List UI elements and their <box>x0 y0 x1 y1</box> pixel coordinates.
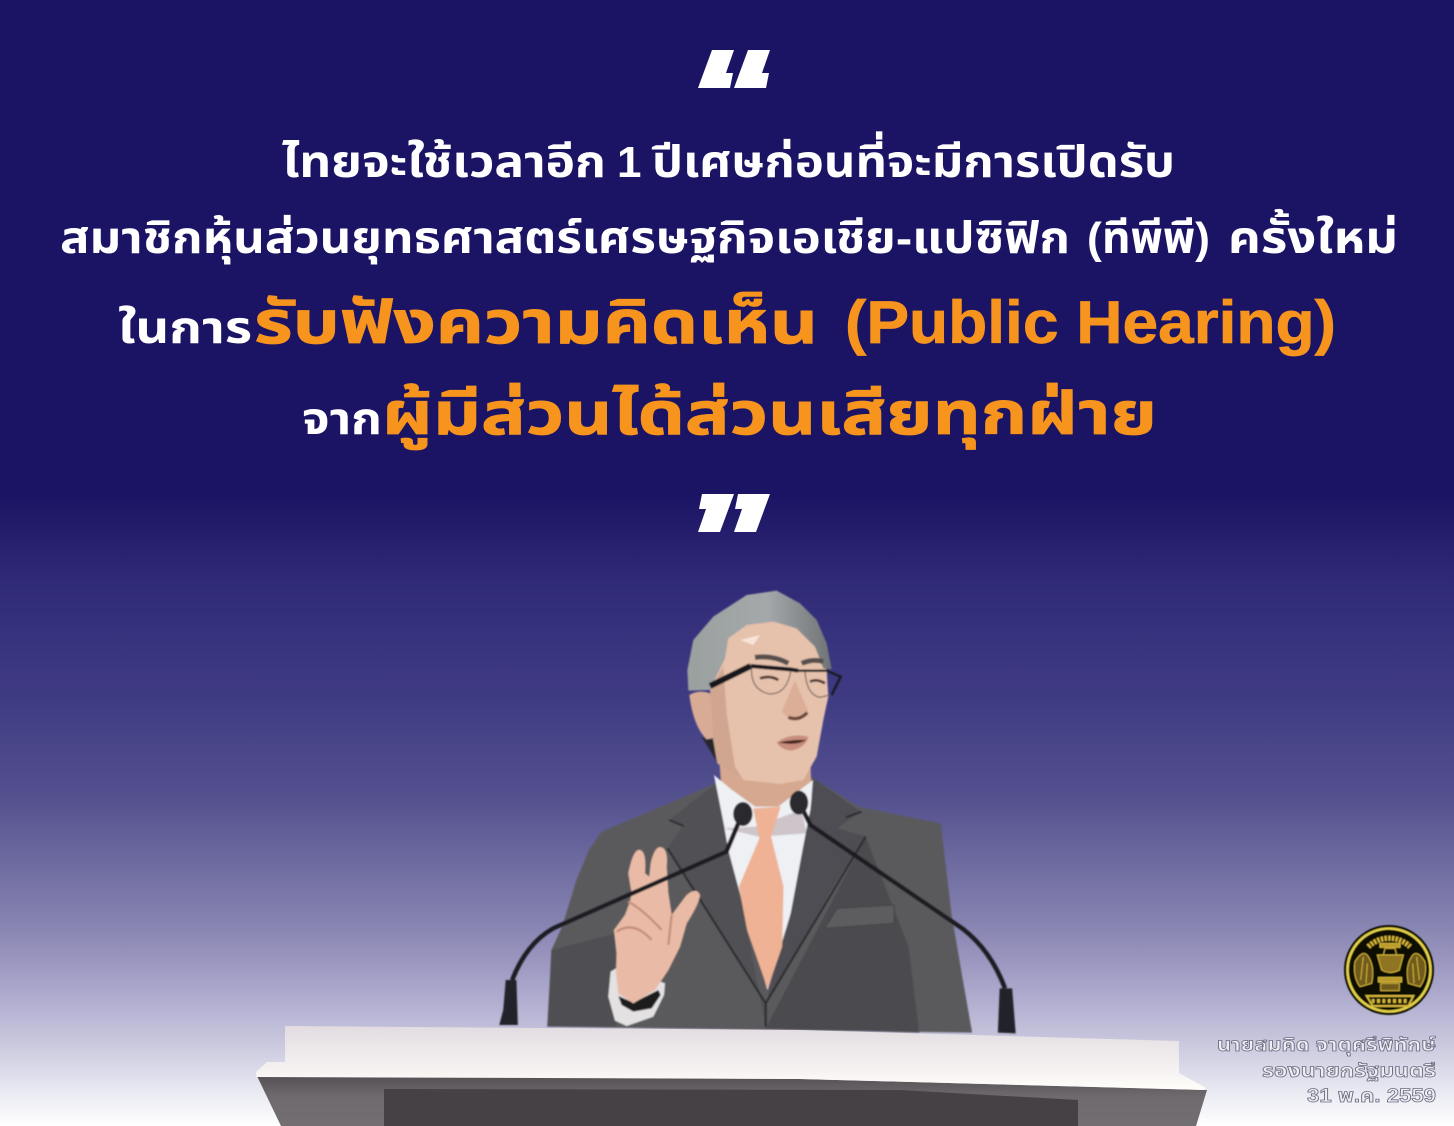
logo: government seal <box>1344 925 1434 1015</box>
left microphone <box>499 802 752 1025</box>
quote line 4: ผู้มีส่วนได้ส่วนเสียทุกฝ่าย <box>382 380 1157 450</box>
eyes <box>760 677 825 683</box>
head <box>687 591 841 784</box>
icon: closing quotation mark <box>698 494 770 532</box>
quote line 2: ครั้งใหม่ <box>1228 209 1398 263</box>
icon: opening quotation mark <box>698 50 770 88</box>
mouth <box>777 736 808 751</box>
quote line 1: 1 <box>617 138 641 187</box>
quote line 3: (Public Hearing) <box>845 289 1336 356</box>
quote line 4 <box>302 380 1157 450</box>
necktie <box>739 807 784 988</box>
nose <box>782 680 808 719</box>
torso <box>547 760 972 1033</box>
lapels <box>667 783 766 1027</box>
raised hand <box>608 847 700 1026</box>
shirt <box>714 775 813 990</box>
quote line 2 <box>60 209 1398 265</box>
quote line 4: จาก <box>302 395 382 444</box>
ear <box>689 692 717 739</box>
hair at neck <box>702 737 717 763</box>
jacket shading <box>766 837 919 1033</box>
speaker role: รองนายกรัฐมนตรี <box>1262 1061 1436 1082</box>
eyebrows <box>755 657 823 663</box>
lectern body <box>257 1076 1207 1126</box>
watch band <box>618 990 661 1012</box>
lectern top <box>256 1026 1206 1090</box>
right microphone <box>790 791 1016 1033</box>
lectern dark panel <box>384 1089 1078 1126</box>
hair <box>687 591 832 691</box>
quote line 3: รับฟังความคิดเห็น <box>254 289 818 356</box>
quote line 1: ปีเศษก่อนที่จะมีการเปิดรับ <box>651 131 1175 187</box>
quote line 1: ไทยจะใช้เวลาอีก <box>282 138 606 187</box>
speaker at microphones <box>499 591 1016 1033</box>
glasses <box>710 666 841 697</box>
quote line 1 <box>282 131 1175 187</box>
neck <box>719 760 812 820</box>
face <box>710 620 828 784</box>
quote line 3 <box>118 289 1336 356</box>
lectern <box>256 1026 1207 1126</box>
palm and fingers <box>614 847 700 1003</box>
quote line 2: สมาชิกหุ้นส่วนยุทธศาสตร์เศรษฐกิจเอเชีย-แปซิฟิก <box>60 214 1070 265</box>
jacket <box>547 778 972 1033</box>
headline quote <box>60 131 1398 450</box>
quote line 3: ในการ <box>118 304 252 353</box>
speaker name: นายสมคิด จาตุศรีพิทักษ์ <box>1217 1035 1436 1056</box>
speaker caption <box>1217 1035 1436 1107</box>
quote line 2: (ทีพีพี) <box>1087 214 1210 263</box>
date: 31 พ.ค. 2559 <box>1307 1086 1436 1107</box>
shirt cuff <box>608 966 665 1026</box>
